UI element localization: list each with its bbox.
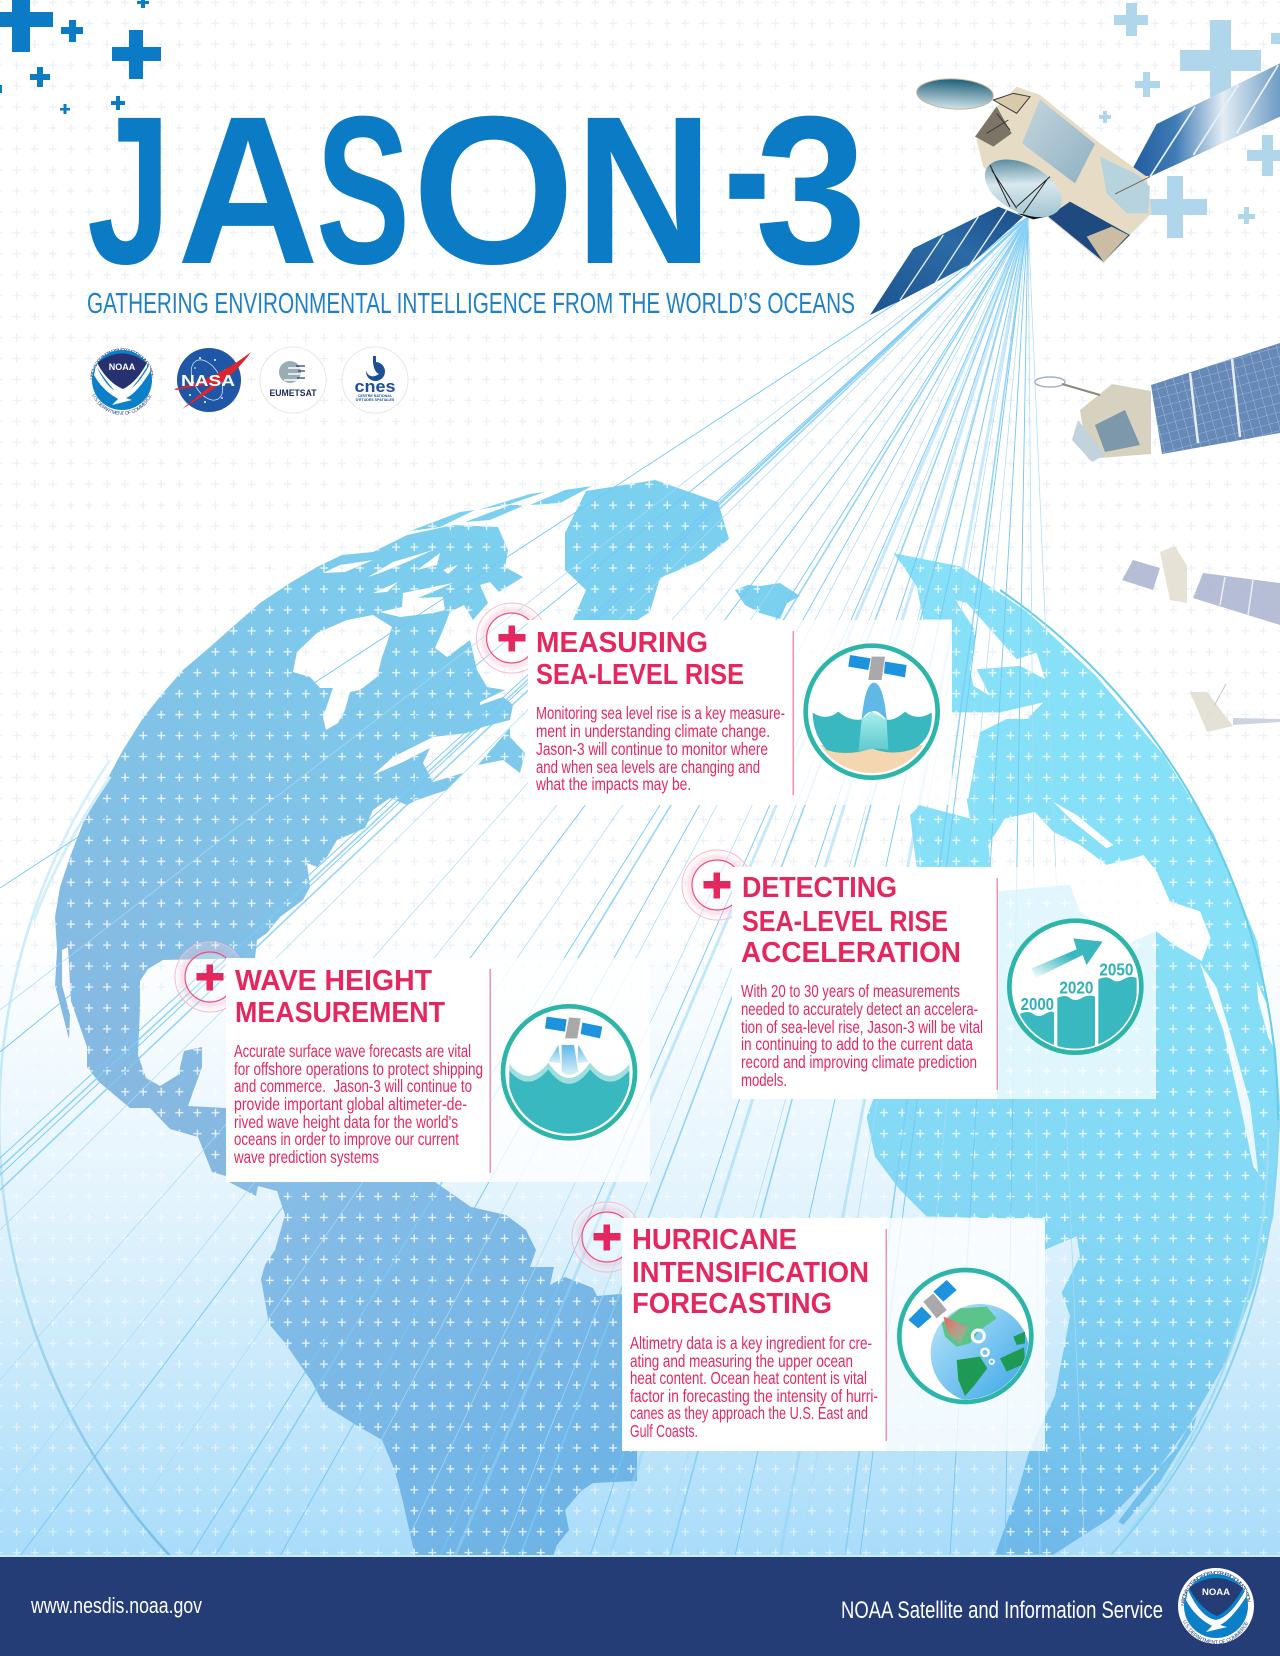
body text: Monitoring sea level rise is a key measure- (536, 703, 785, 723)
icon: sea level (806, 646, 938, 778)
card: measuring sea-level rise (476, 603, 952, 805)
heading: INTENSIFICATION (632, 1257, 869, 1289)
body text: oceans in order to improve our current (234, 1129, 459, 1149)
body text: factor in forecasting the intensity of hurri- (630, 1386, 878, 1406)
body text (535, 703, 785, 794)
title: S (316, 72, 410, 308)
land: south america (220, 1170, 650, 1556)
icon: hurricane globe (899, 1270, 1031, 1403)
icon: rising bars: 2020 (1059, 977, 1093, 997)
body text: Jason-3 will continue to monitor where (536, 739, 768, 759)
logo: NOAA: NOAA (109, 362, 136, 372)
body text: record and improving climate prediction (741, 1052, 977, 1072)
marker plus (682, 850, 752, 920)
body text: ment in understanding climate change. (536, 721, 770, 741)
body text: and when sea levels are changing and (536, 757, 760, 777)
satellite 4 (1190, 684, 1280, 732)
logo: NOAA: NATIONAL OCEANIC AND ATMOSPHERIC ADMINISTRATION (90, 348, 154, 380)
title: O (412, 72, 575, 308)
body text: ating and measuring the upper ocean (630, 1351, 853, 1371)
heading (632, 1224, 869, 1320)
icon: rising bars: 2000 (1021, 994, 1054, 1014)
footer NOAA logo: NATIONAL OCEANIC AND ATMOSPHERIC ADMINISTRATION (1181, 1571, 1251, 1606)
card: wave height measurement (175, 942, 650, 1182)
body text: wave prediction systems (233, 1147, 379, 1167)
title: A (177, 72, 319, 308)
card: hurricane intensification forecasting (572, 1202, 1045, 1451)
card: detecting sea-level rise acceleration (682, 850, 1156, 1099)
body text: rived wave height data for the world's (234, 1112, 458, 1132)
body text (741, 981, 983, 1090)
marker plus (175, 942, 245, 1012)
logo: NASA: NASA (181, 373, 236, 390)
spacecraft body (916, 77, 1152, 263)
title: J (87, 72, 171, 308)
body text: heat content. Ocean heat content is vital (630, 1368, 867, 1388)
left solar panel (870, 207, 1023, 315)
icon: rising bars (1009, 921, 1141, 1053)
satellite 2 (1035, 343, 1280, 462)
body text: for offshore operations to protect shipping (234, 1059, 483, 1079)
title: N (575, 72, 713, 308)
satellite 3 (1122, 546, 1280, 625)
footer NOAA logo: NOAA (1202, 1587, 1230, 1598)
body text (630, 1333, 878, 1441)
logo: NASA (174, 348, 251, 412)
land: europe and africa (860, 540, 1280, 1556)
small plus signs top left (0, 0, 161, 114)
body text (233, 1041, 483, 1167)
logo: CNES: cnes (354, 377, 396, 396)
heading: HURRICANE (632, 1224, 797, 1256)
title: 3 (755, 72, 867, 308)
heading (536, 627, 744, 691)
body text: and commerce. Jason-3 will continue to (234, 1076, 472, 1096)
icon: rising bars: 2050 (1099, 959, 1133, 979)
footer service name: NOAA Satellite and Information Service (841, 1597, 1163, 1624)
body text: canes as they approach the U.S. East and (630, 1403, 868, 1423)
heading: MEASUREMENT (235, 997, 445, 1029)
title: - (724, 50, 770, 286)
body text: models. (741, 1070, 787, 1090)
main satellite (870, 63, 1280, 315)
subtitle: GATHERING ENVIRONMENTAL INTELLIGENCE FROM THE WORLD’S OCEANS (87, 288, 855, 320)
body text: Altimetry data is a key ingredient for cre- (630, 1333, 872, 1353)
logo: CNES: D'ÉTUDES SPATIALES (356, 397, 395, 402)
heading: WAVE HEIGHT (235, 965, 432, 997)
logo: CNES (342, 347, 408, 413)
title (87, 50, 867, 308)
logo: EUMETSAT: EUMETSAT (270, 388, 317, 398)
heading: ACCELERATION (741, 937, 961, 969)
footer NOAA logo: U.S. DEPARTMENT OF COMMERCE (1184, 1620, 1248, 1644)
body text: tion of sea-level rise, Jason-3 will be vital (741, 1017, 983, 1037)
footer NOAA logo (1178, 1568, 1254, 1644)
body text: With 20 to 30 years of measurements (741, 981, 960, 1001)
land: north america (40, 470, 800, 1200)
marker plus (476, 603, 546, 673)
logo: EUMETSAT (260, 347, 326, 413)
body text: Gulf Coasts. (630, 1421, 698, 1441)
footer url: www.nesdis.noaa.gov (30, 1593, 202, 1618)
heading (741, 872, 961, 969)
globe (0, 470, 1280, 1556)
body text: provide important global altimeter-de- (234, 1094, 467, 1114)
body text: Accurate surface wave forecasts are vital (234, 1041, 471, 1061)
marker plus (572, 1202, 642, 1272)
heading: FORECASTING (632, 1288, 832, 1320)
body text: needed to accurately detect an accelera- (741, 999, 978, 1019)
heading: DETECTING (742, 872, 897, 904)
right solar panel (1130, 63, 1280, 177)
logo: CNES: CENTRE NATIONAL (358, 394, 393, 398)
footer bar (0, 1555, 1280, 1656)
heading: SEA-LEVEL RISE (742, 906, 948, 938)
body text: what the impacts may be. (535, 774, 691, 794)
icon: wave (503, 1006, 635, 1143)
light rays from satellite (0, 217, 1085, 1556)
small plus signs top right (1099, 3, 1280, 238)
heading: MEASURING (536, 627, 708, 659)
globe outline (0, 590, 1278, 1556)
heading (235, 965, 445, 1029)
body text: in continuing to add to the current data (741, 1034, 973, 1054)
logo: NOAA: U.S. DEPARTMENT OF COMMERCE (92, 394, 152, 415)
heading: SEA-LEVEL RISE (536, 659, 744, 691)
logo: NOAA (86, 348, 158, 415)
logos row (86, 346, 408, 415)
